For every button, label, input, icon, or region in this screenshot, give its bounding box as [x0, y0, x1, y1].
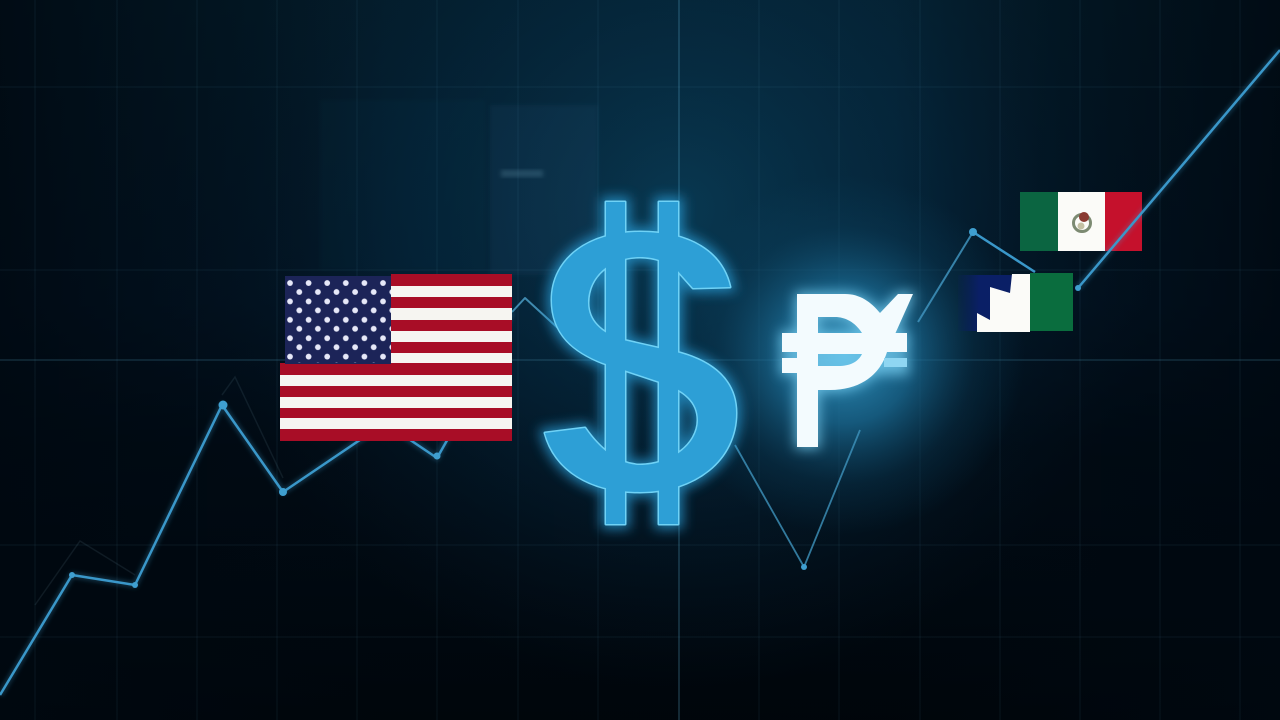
- flag: United States: [280, 274, 512, 441]
- flag: Mexico: [1020, 192, 1142, 251]
- chart data points: [69, 228, 1081, 588]
- faint shadow chart line: [35, 377, 283, 605]
- peso glow: [782, 294, 913, 447]
- canton with stars: [285, 276, 391, 364]
- icon: peso sign: [782, 294, 913, 447]
- peso glow: [650, 170, 1040, 540]
- icon: coat of arms: [1074, 212, 1090, 232]
- dollar outline: [545, 202, 736, 524]
- ghost panel behind the dollar sign: [320, 100, 598, 275]
- flag: partly revealed green and white flag: [958, 273, 1073, 332]
- dollar fill: [545, 202, 736, 524]
- icon: dollar sign: [545, 202, 736, 524]
- peso shape: [782, 294, 913, 447]
- dollar glow: [545, 202, 736, 524]
